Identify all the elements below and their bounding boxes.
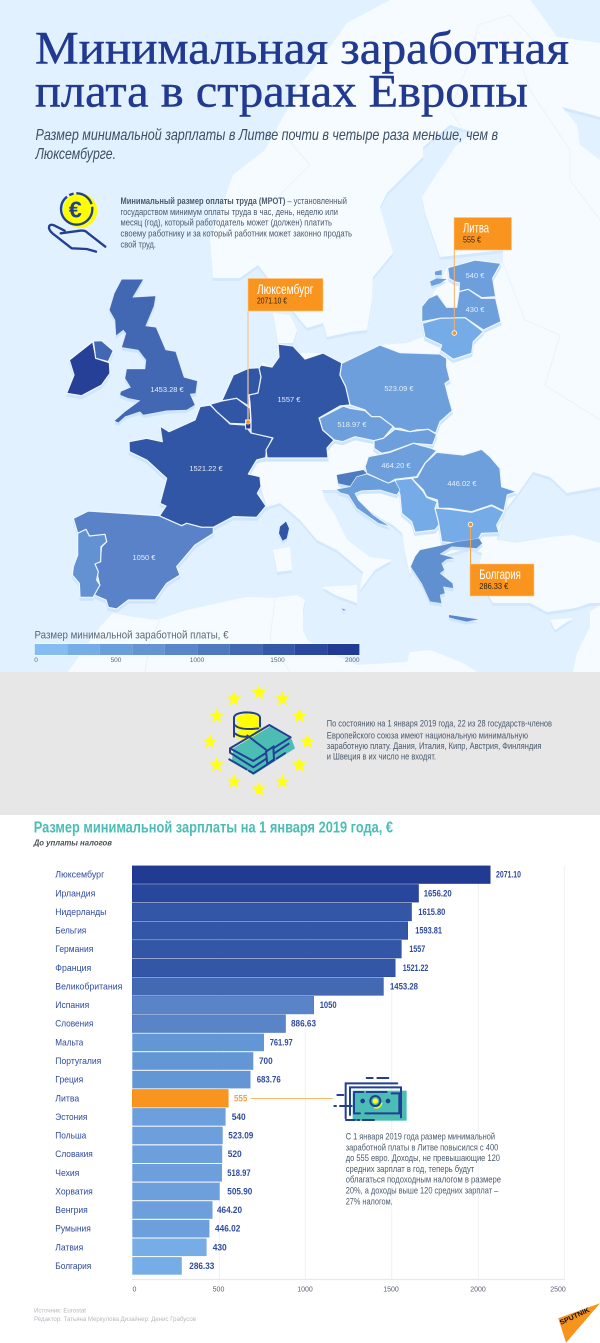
bar: Франция — [55, 959, 428, 977]
bar: Германия: Германия — [55, 944, 93, 955]
chart axis labels: 0 — [132, 1286, 136, 1294]
bar: Польша: 523.09 — [228, 1130, 253, 1140]
legend: colour scale: Размер минимальной заработной платы, € — [34, 630, 228, 642]
callout: Lithuania — [452, 218, 512, 335]
bar: Нидерланды: 1615.80 — [418, 907, 445, 917]
chart axis labels: 1500 — [383, 1286, 399, 1294]
bar: Словения: Словения — [55, 1019, 93, 1030]
Lithuania tax note: облагаться подоходным налогом в размере — [346, 1175, 501, 1185]
bar: Словакия: 520 — [228, 1149, 242, 1159]
Slovakia — [374, 429, 437, 453]
bar: Эстония: 540 — [232, 1112, 246, 1122]
chart axis labels: 1000 — [297, 1286, 313, 1294]
bar: Испания: 1050 — [320, 1000, 337, 1010]
bar: Венгрия: Венгрия — [55, 1205, 88, 1216]
icon: banknote — [334, 1078, 407, 1121]
map value labels: 464.20 € — [381, 461, 411, 470]
bar: Латвия: 430 — [213, 1242, 227, 1252]
bar: Словения — [55, 1015, 316, 1032]
callout: Lithuania: Литва — [463, 220, 489, 236]
bar: Португалия — [55, 1052, 273, 1070]
chart subheading: До уплаты налогов — [33, 838, 112, 848]
bar: Греция: 683.76 — [257, 1075, 281, 1085]
map value labels: 518.97 € — [337, 420, 367, 429]
bar: Португалия: 700 — [259, 1056, 273, 1066]
map value labels: 430 € — [466, 305, 485, 314]
map value labels: 523.09 € — [384, 384, 414, 393]
legend: colour scale — [34, 630, 360, 664]
bar: Бельгия: Бельгия — [55, 926, 86, 937]
bar: Бельгия: 1593.81 — [415, 926, 442, 936]
bar: Греция: Греция — [55, 1075, 83, 1086]
icon: hand holding euro coin — [49, 193, 105, 252]
title — [35, 22, 569, 118]
callout: Lithuania: 555 € — [463, 234, 481, 244]
Lithuania tax note: С 1 января 2019 года размер минимальной — [346, 1131, 495, 1141]
bar: Нидерланды — [55, 903, 445, 921]
bar: Румыния: Румыния — [55, 1224, 91, 1235]
Hungary — [365, 443, 437, 483]
Lithuania tax note: средних зарплат в год, теперь будут — [346, 1164, 474, 1174]
Sputnik logo: SPUTNIK — [559, 1307, 591, 1327]
Spain — [73, 511, 213, 609]
callout: Bulgaria — [468, 522, 534, 596]
panel: EU note band — [0, 672, 600, 815]
bar: Литва highlighted: 555 — [234, 1093, 247, 1103]
Lithuania tax note: 20%, а доходы выше 120 средних зарплат – — [346, 1185, 498, 1195]
title: Минимальная заработная — [35, 22, 569, 74]
bar: Люксембург: Люксембург — [55, 870, 105, 881]
bar: Мальта — [55, 1034, 293, 1051]
chart axis labels: 500 — [213, 1286, 224, 1294]
bar: Хорватия — [55, 1183, 252, 1200]
bar: Германия: 1557 — [409, 944, 425, 954]
bar: Франция: 1521.22 — [403, 963, 428, 973]
title: плата в странах Европы — [35, 66, 528, 118]
map value labels — [133, 271, 485, 562]
bar: Ирландия: Ирландия — [55, 888, 95, 899]
map value labels: 1557 € — [278, 395, 301, 404]
legend: colour scale: 2000 — [345, 657, 360, 664]
definition text: Минимальный размер оплаты труда (МРОТ) – установленный — [120, 196, 347, 206]
EU note text: и Швеция в их число не входят. — [327, 752, 436, 762]
map value labels: 1521.22 € — [189, 464, 224, 473]
definition text — [120, 196, 352, 249]
bar: Великобритания — [55, 978, 418, 995]
Poland — [340, 345, 452, 433]
bar: Португалия: Португалия — [55, 1056, 101, 1067]
EU note text — [327, 719, 552, 762]
choropleth countries — [67, 260, 517, 622]
bar: Румыния: 446.02 — [215, 1224, 240, 1234]
bar: Испания: Испания — [55, 1000, 89, 1011]
chart axis labels — [132, 1286, 566, 1294]
EU note text: Европейского союза имеют национальную минимальную — [327, 730, 528, 740]
callout: Bulgaria: Болгария — [479, 566, 521, 582]
bar: Люксембург — [55, 866, 521, 884]
bar: Люксембург: 2071.10 — [496, 870, 521, 880]
footer credits: Редактор: Татьяна Меркулова Дизайнер: Денис Грабусов — [34, 1315, 197, 1323]
Ireland — [67, 342, 110, 396]
bar: Польша — [55, 1127, 253, 1144]
Germany — [249, 344, 350, 458]
footer credits — [34, 1307, 197, 1323]
map value labels: 540 € — [466, 271, 485, 280]
definition text: государством минимум оплаты труда в час, день, неделю или — [120, 207, 338, 217]
legend: colour scale: 1000 — [190, 657, 205, 664]
Latvia — [422, 289, 501, 330]
bar: Хорватия: 505.90 — [227, 1186, 252, 1196]
bar: Мальта: 761.97 — [270, 1037, 293, 1047]
bar: Чехия — [55, 1164, 251, 1182]
bar: Великобритания: Великобритания — [55, 982, 122, 992]
bar: Литва highlighted: Литва — [55, 1093, 80, 1104]
chart axis labels: 2500 — [550, 1286, 566, 1294]
Sputnik logo — [558, 1303, 600, 1343]
legend: colour scale: 1500 — [270, 657, 285, 664]
Luxembourg — [246, 420, 251, 429]
Slovenia — [337, 470, 367, 487]
Bulgaria — [435, 506, 504, 543]
icon: EU stars with money — [202, 685, 315, 796]
callout: Luxembourg — [246, 278, 323, 424]
Lithuania tax note: заработной платы в Литве повысился с 400 — [346, 1142, 498, 1152]
footer credits: Источник: Eurostat — [34, 1307, 86, 1314]
bar: Греция — [55, 1071, 281, 1088]
bar: Болгария: Болгария — [55, 1261, 91, 1272]
bar: Ирландия: 1656.20 — [424, 888, 452, 898]
bar: Ирландия — [55, 884, 452, 902]
map value labels: 1050 € — [133, 553, 156, 562]
bar: Чехия: 518.97 — [227, 1168, 251, 1178]
EU note text: По состоянию на 1 января 2019 года, 22 из 28 государств-членов — [327, 719, 552, 729]
bar: Польша: Польша — [55, 1130, 87, 1142]
bar chart — [55, 866, 566, 1294]
Portugal — [72, 529, 107, 597]
map value labels: 446.02 € — [447, 479, 477, 488]
bar: Бельгия — [55, 922, 442, 939]
subtitle — [35, 127, 498, 163]
bar: Венгрия: 464.20 — [217, 1205, 242, 1215]
Lithuania tax note — [346, 1131, 501, 1206]
Belgium — [210, 398, 251, 424]
EU note text: заработную плату. Дания, Италия, Кипр, Австрия, Финляндия — [327, 741, 542, 751]
legend: colour scale: 500 — [111, 657, 122, 664]
leader line from Lithuania bar — [251, 1098, 333, 1100]
callout: Luxembourg: 2071.10 € — [257, 296, 287, 306]
bar: Германия — [55, 940, 425, 958]
bar: Мальта: Мальта — [55, 1037, 84, 1048]
Northern Ireland — [93, 341, 113, 362]
bar: Литва highlighted — [55, 1090, 247, 1107]
United Kingdom — [109, 279, 197, 423]
bar: Словакия: Словакия — [55, 1149, 93, 1160]
background land masses — [68, 0, 600, 672]
bar: Франция: Франция — [55, 963, 91, 974]
chart axis labels: 2000 — [470, 1286, 486, 1294]
Crete — [449, 615, 478, 622]
bar: Болгария: 286.33 — [189, 1261, 214, 1271]
Estonia — [448, 260, 501, 298]
bar: Хорватия: Хорватия — [55, 1186, 93, 1197]
chart heading: Размер минимальной зарплаты на 1 января 2019 года, € — [34, 820, 393, 837]
definition text: своему работнику и за который работник может законно продать — [120, 229, 352, 239]
map value labels: 1453.28 € — [150, 385, 185, 394]
definition text: свой труд. — [120, 239, 156, 249]
Corsica — [279, 522, 289, 541]
definition text: месяц (год), который работодатель может (должен) платить — [120, 218, 332, 228]
legend: colour scale: 0 — [34, 657, 38, 664]
callout: Luxembourg: Люксембург — [257, 281, 314, 297]
Lithuania tax note: до 555 евро. Доходы, не превышающие 120 — [346, 1153, 500, 1163]
Czechia — [319, 406, 393, 442]
France — [129, 405, 273, 527]
Serbia — [395, 478, 442, 532]
bar: Латвия — [55, 1238, 227, 1256]
bar: Великобритания: 1453.28 — [390, 982, 418, 992]
bar: Болгария — [55, 1257, 214, 1275]
Lithuania tax note: 27% налогом. — [346, 1196, 393, 1206]
bar: Венгрия — [55, 1201, 242, 1219]
Romania — [412, 449, 517, 512]
bar: Латвия: Латвия — [55, 1242, 83, 1253]
Netherlands — [222, 368, 261, 407]
callout: Bulgaria: 286.33 € — [479, 581, 509, 591]
Croatia — [336, 474, 400, 527]
bar: Эстония: Эстония — [55, 1112, 87, 1123]
subtitle: Люксембурге. — [35, 146, 116, 163]
bar: Словения: 886.63 — [291, 1019, 316, 1029]
bar: Чехия: Чехия — [55, 1168, 79, 1179]
bar: Румыния — [55, 1220, 240, 1238]
icon: hand holding euro coin: € — [69, 196, 82, 222]
bar: Нидерланды: Нидерланды — [55, 907, 106, 918]
bar: Испания — [55, 996, 337, 1014]
bar: Эстония — [55, 1108, 246, 1126]
Greece — [411, 538, 482, 603]
bar: Словакия — [55, 1145, 242, 1163]
Estonian islands — [430, 270, 447, 286]
Malta — [342, 608, 346, 611]
panel: map background sea — [0, 0, 600, 672]
Lithuania — [422, 318, 483, 359]
